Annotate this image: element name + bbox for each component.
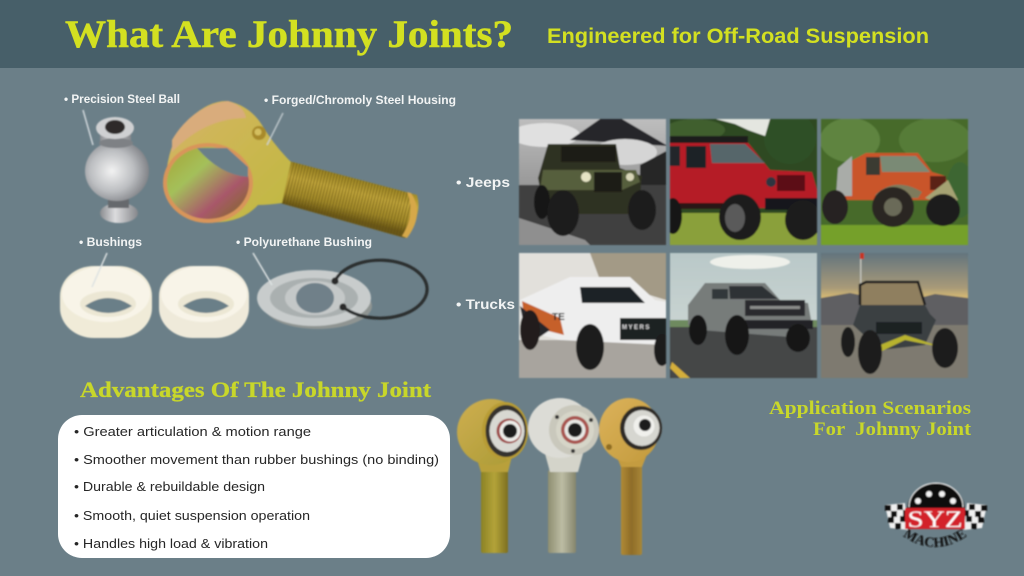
icon: white bushings xyxy=(60,253,249,338)
heading: advantages: Advantages Of The Johnny Joint xyxy=(80,377,432,402)
photo: white race truck: MYERS xyxy=(622,325,651,331)
panel: advantages list xyxy=(58,415,450,558)
label: precision steel ball: • Precision Steel Ball xyxy=(64,92,180,106)
label: forged housing: • Forged/Chromoly Steel Housing xyxy=(264,93,456,107)
rod end: gold xyxy=(457,399,528,553)
caption: application scenarios: For Johnny Joint xyxy=(813,419,972,440)
label: bushings: • Bushings xyxy=(79,235,142,249)
photo: white race truck xyxy=(519,253,670,378)
photo: grey jeep with volcano xyxy=(510,119,668,245)
label: trucks: • Trucks xyxy=(456,297,515,312)
caption: application scenarios: Application Scenarios xyxy=(769,398,971,419)
label: polyurethane bushing: • Polyurethane Bushing xyxy=(236,235,372,249)
label: jeeps: • Jeeps xyxy=(456,175,510,190)
logo: SYZ Machine xyxy=(884,482,988,548)
rod end: silver xyxy=(528,398,599,553)
logo: SYZ Machine: SYZ xyxy=(908,507,962,532)
advantage 4: • Smooth, quiet suspension operation xyxy=(74,508,310,523)
icon: housing with thread xyxy=(163,101,418,238)
icon: washers and snap ring xyxy=(253,253,427,329)
caption: application scenarios xyxy=(769,398,972,440)
title: What Are Johnny Joints? xyxy=(65,13,513,56)
advantage 2: • Smoother movement than rubber bushings (no binding) xyxy=(74,452,439,467)
icon: three assembled rod ends xyxy=(457,398,662,555)
header band xyxy=(0,0,1024,68)
photo: white race truck: TE xyxy=(552,312,565,323)
subtitle: Engineered for Off-Road Suspension xyxy=(547,25,929,48)
advantage 5: • Handles high load & vibration xyxy=(74,536,268,551)
panel: exploded parts xyxy=(60,92,456,338)
rod end: bronze xyxy=(599,398,662,555)
photo grid: vehicles xyxy=(510,112,974,378)
photo: side-by-side UTV at sunset xyxy=(821,253,968,378)
icon: steel ball xyxy=(83,110,149,223)
advantage 1: • Greater articulation & motion range xyxy=(74,424,311,439)
photo: orange jeep xyxy=(820,118,974,245)
logo: SYZ Machine: MACHINE xyxy=(902,528,968,548)
photo: red jeep xyxy=(664,112,821,245)
photo: gray pickup on road xyxy=(670,253,817,378)
advantage 3: • Durable & rebuildable design xyxy=(74,479,265,494)
